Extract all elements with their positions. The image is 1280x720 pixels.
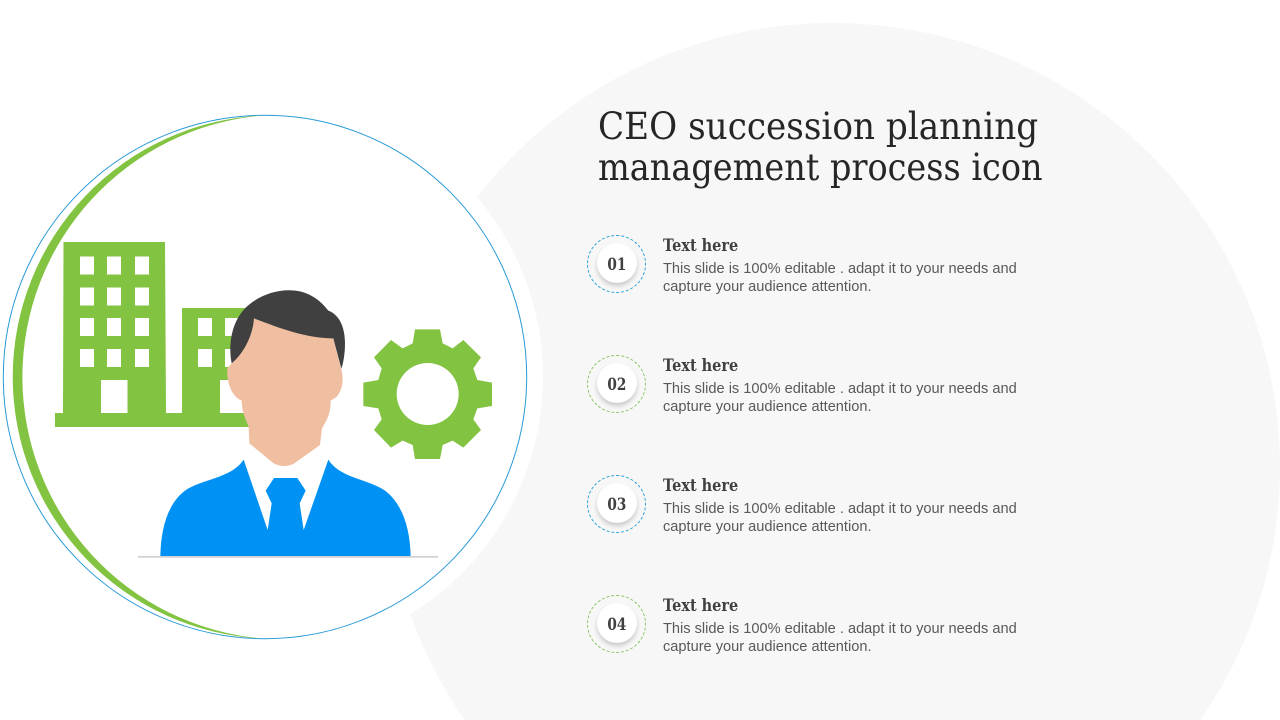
description 02: capture your audience attention.	[663, 399, 872, 415]
heading 04: Text here	[663, 596, 738, 615]
description 01: This slide is 100% editable . adapt it to your needs and	[663, 261, 1017, 277]
number badge 04: 04	[608, 615, 626, 635]
item 04	[587, 595, 1017, 655]
description 04: capture your audience attention.	[663, 639, 872, 655]
description 01	[663, 261, 1017, 295]
heading 03: Text here	[663, 476, 738, 495]
white circle behind illustration	[0, 99, 543, 655]
description 04: This slide is 100% editable . adapt it to your needs and	[663, 621, 1017, 637]
icon: gear	[363, 329, 492, 459]
heading 02: Text here	[663, 356, 738, 375]
blue outline circle	[3, 115, 527, 639]
title: management process icon	[598, 146, 1043, 189]
desk line	[138, 556, 438, 558]
description 04	[663, 621, 1017, 655]
green crescent	[13, 116, 262, 638]
description 02	[663, 381, 1017, 415]
number badge 01	[587, 235, 646, 293]
heading 01: Text here	[663, 236, 738, 255]
description 02: This slide is 100% editable . adapt it to your needs and	[663, 381, 1017, 397]
background circle	[385, 23, 1280, 720]
number badge 01: 01	[608, 255, 626, 275]
title: CEO succession planning	[598, 105, 1038, 148]
face	[227, 318, 343, 466]
description 03	[663, 501, 1017, 535]
item 03	[587, 475, 1017, 535]
number badge 03	[587, 475, 646, 533]
title	[598, 105, 1043, 189]
item 02	[587, 355, 1017, 415]
number badge 02: 02	[608, 375, 626, 395]
item 01	[587, 235, 1017, 295]
description 03: This slide is 100% editable . adapt it to your needs and	[663, 501, 1017, 517]
description 01: capture your audience attention.	[663, 279, 872, 295]
number badge 04	[587, 595, 646, 653]
description 03: capture your audience attention.	[663, 519, 872, 535]
number badge 02	[587, 355, 646, 413]
icon: businessman	[138, 290, 438, 558]
number badge 03: 03	[608, 495, 626, 515]
icon: office buildings	[55, 242, 250, 427]
hair	[230, 290, 345, 369]
suit	[160, 460, 411, 556]
